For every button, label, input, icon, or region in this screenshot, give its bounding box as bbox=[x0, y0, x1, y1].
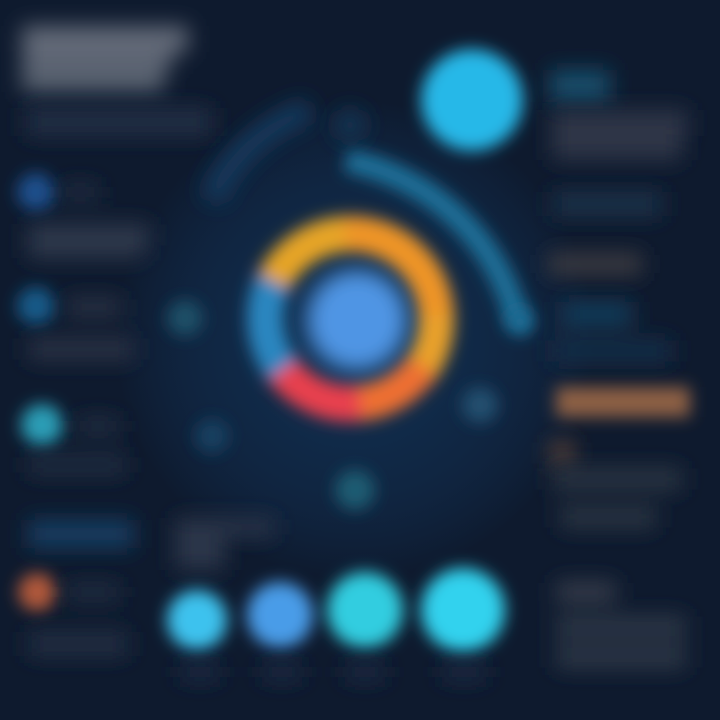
right text 4 bbox=[556, 582, 686, 668]
left item 2 text bbox=[28, 298, 134, 360]
small nodes bbox=[167, 300, 498, 510]
arc: large blue bbox=[346, 160, 518, 322]
central glow bbox=[115, 100, 595, 580]
bottom circle labels bbox=[180, 664, 486, 680]
blue segment bbox=[265, 280, 283, 370]
donut chart bbox=[265, 234, 436, 404]
circle 1 bbox=[167, 590, 227, 650]
arc: arrow tip bbox=[506, 308, 534, 336]
icon: cyan dot bbox=[21, 404, 63, 446]
bottom circles row bbox=[167, 568, 505, 652]
bottom label bbox=[175, 518, 275, 570]
right text 3 bbox=[552, 468, 682, 528]
right text 1 bbox=[552, 110, 688, 160]
subtitle bbox=[26, 108, 212, 136]
orange segment bbox=[345, 234, 436, 325]
left item 4 text bbox=[28, 584, 128, 656]
circle 2 bbox=[247, 582, 313, 648]
left item 1 text bbox=[28, 184, 150, 258]
icon: teal dot bbox=[17, 287, 55, 325]
amber segment bbox=[417, 315, 436, 374]
right text 2 bbox=[552, 192, 662, 216]
center circle bbox=[307, 270, 407, 370]
orange-red segment bbox=[345, 366, 422, 403]
arc: faint top bbox=[334, 109, 366, 141]
icon: large cyan circle bbox=[421, 49, 523, 151]
right blue text bbox=[552, 302, 672, 362]
left blue text bbox=[28, 520, 134, 548]
node bottom-left bbox=[195, 419, 229, 453]
panel: left column bbox=[17, 173, 150, 656]
panel: right column bbox=[548, 70, 690, 668]
circle 3 bbox=[327, 572, 403, 648]
right orange small bbox=[550, 442, 574, 464]
node bottom bbox=[335, 470, 375, 510]
yellow segment bbox=[274, 234, 350, 281]
icon: orange dot bbox=[18, 573, 56, 611]
node right bbox=[462, 387, 498, 423]
red segment bbox=[283, 370, 360, 404]
icon: blue dot bbox=[17, 173, 55, 211]
arc: faint left bbox=[212, 110, 310, 200]
circle 4 bbox=[421, 568, 505, 652]
node left bbox=[167, 300, 203, 336]
left item 3 text bbox=[28, 418, 126, 474]
right blue heading bbox=[550, 70, 610, 102]
right orange line bbox=[548, 254, 642, 274]
title block bbox=[22, 26, 188, 92]
orange bar bbox=[556, 387, 690, 417]
